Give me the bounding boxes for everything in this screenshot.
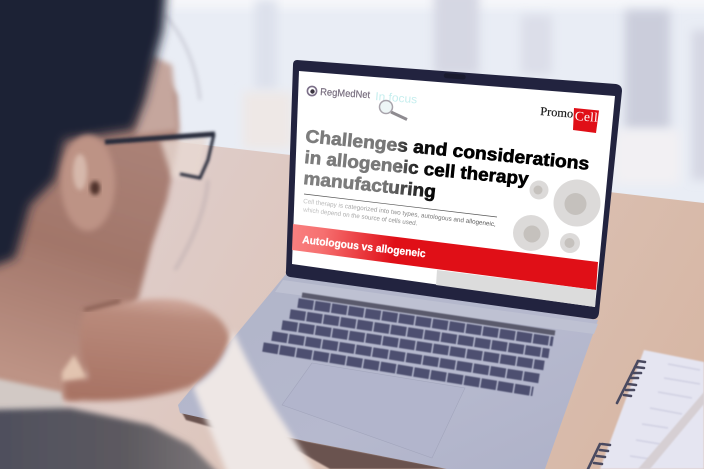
logo square xyxy=(573,108,599,133)
laptop shadow xyxy=(180,409,450,469)
spiral binding lower xyxy=(588,444,610,469)
shoulder, dark top xyxy=(0,408,225,469)
laptop base xyxy=(178,274,598,469)
logo text: Promo: Promo xyxy=(540,104,574,121)
forehead glow xyxy=(135,55,178,135)
title line 2: in allogeneic cell therapy xyxy=(304,147,529,189)
cell large xyxy=(554,180,600,226)
cell small bottom xyxy=(560,233,580,253)
section heading: Autologous vs allogeneic xyxy=(302,234,426,260)
icon: magnifying glass xyxy=(380,100,407,120)
white sleeve xyxy=(193,330,320,469)
pen xyxy=(638,392,704,469)
glasses xyxy=(105,134,215,178)
wordmark: RegMedNet xyxy=(320,87,371,101)
title line 3: manufacturing xyxy=(303,168,437,202)
screen bezel xyxy=(286,60,622,319)
key row 5 xyxy=(263,347,533,392)
temple arm xyxy=(105,134,215,142)
cell small top xyxy=(530,180,548,200)
logo mark xyxy=(307,86,317,96)
notebook with pen xyxy=(588,350,704,469)
touch bar xyxy=(302,295,555,333)
hinge highlight area xyxy=(275,280,598,334)
lens glare xyxy=(160,136,208,178)
notebook page xyxy=(600,350,704,469)
key row 2 xyxy=(290,314,549,354)
wooden table xyxy=(0,141,704,469)
title line 1: Challenges and considerations xyxy=(305,126,590,174)
key row 3 xyxy=(282,325,544,366)
intro line 2: which depend on the source of cells used. xyxy=(302,206,418,227)
ear canal xyxy=(90,181,100,195)
crease between neck and arm xyxy=(84,301,120,310)
woman in foreground xyxy=(0,0,320,469)
red section band xyxy=(292,224,598,290)
handwriting xyxy=(630,364,700,459)
neck and face xyxy=(0,60,179,400)
decorative cell circles xyxy=(513,180,600,253)
RegMedNet logo xyxy=(307,86,371,101)
loose hair strands xyxy=(165,15,208,270)
collar xyxy=(0,375,65,418)
PromoCell logo xyxy=(540,104,599,133)
hair xyxy=(0,0,168,275)
webcam notch xyxy=(444,73,466,80)
trackpad xyxy=(282,363,465,458)
ear shape xyxy=(61,135,115,231)
grey panel xyxy=(436,270,596,307)
ear xyxy=(61,135,115,231)
laptop xyxy=(178,60,622,469)
intro text xyxy=(302,198,496,228)
frame edge xyxy=(180,134,214,178)
ear highlight xyxy=(73,154,87,190)
key row 4 xyxy=(272,336,539,378)
key row 1 xyxy=(298,303,553,342)
display xyxy=(292,71,615,307)
table gap between neck and arm xyxy=(62,355,88,381)
In focus label: In focus xyxy=(375,91,418,106)
spiral binding upper xyxy=(617,361,645,403)
cell medium xyxy=(513,215,549,251)
keyboard xyxy=(263,295,555,392)
background: bright window with curtains xyxy=(0,0,704,210)
intro line 1: Cell therapy is categorized into two types, autologous and allogeneic, xyxy=(303,198,496,228)
display background xyxy=(292,71,615,307)
title xyxy=(303,126,590,202)
forearm and hand xyxy=(64,299,230,401)
logo text: Cell: Cell xyxy=(574,108,599,125)
